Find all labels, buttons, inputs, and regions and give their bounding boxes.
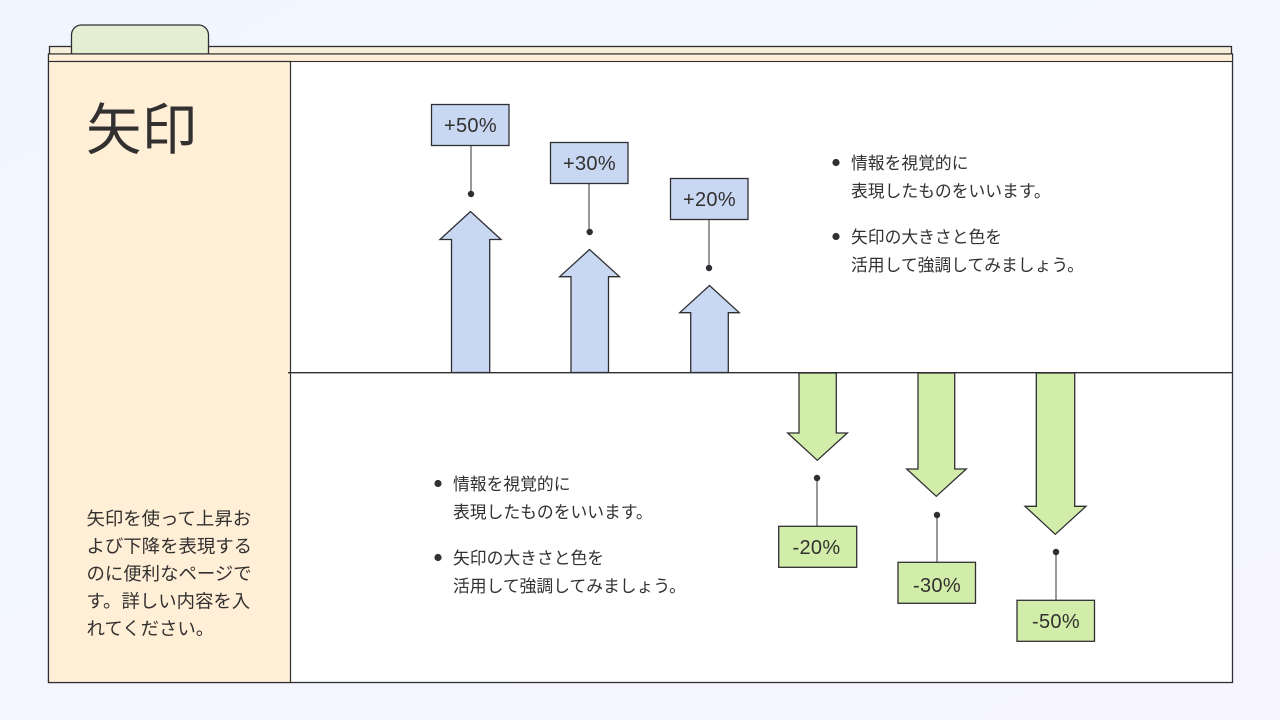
down arrow -20%: -20% bbox=[793, 537, 840, 559]
header band bbox=[48, 54, 1232, 62]
folder tab bbox=[72, 25, 208, 54]
upper bullet text: 矢印の大きさと色を bbox=[851, 228, 1002, 247]
sidebar panel bbox=[48, 62, 290, 682]
up arrow +30%: +30% bbox=[563, 153, 616, 175]
lower bullet text: 矢印の大きさと色を bbox=[453, 549, 604, 568]
sidebar description: す。詳しい内容を入 bbox=[86, 590, 250, 612]
upper bullet text: 活用して強調してみましょう。 bbox=[851, 256, 1084, 275]
folder back strip bbox=[50, 46, 1232, 54]
up arrow +50%: +50% bbox=[444, 115, 497, 137]
down arrow -20% bbox=[779, 373, 857, 567]
up arrow +30% bbox=[550, 142, 628, 372]
lower bullet text bbox=[434, 475, 686, 596]
down arrow -50% bbox=[1017, 373, 1094, 641]
down arrows group bbox=[779, 373, 1094, 641]
title: 矢印 bbox=[86, 100, 197, 162]
down arrow -30%: -30% bbox=[913, 575, 961, 597]
sidebar description bbox=[86, 508, 252, 639]
up arrow +50% bbox=[432, 104, 509, 372]
sidebar description: よび下降を表現する bbox=[86, 536, 252, 556]
up arrow +20% bbox=[670, 178, 748, 372]
down arrow -30% bbox=[898, 373, 976, 603]
up arrows group bbox=[432, 104, 748, 372]
sidebar description: れてください。 bbox=[86, 618, 214, 639]
sidebar description: 矢印を使って上昇お bbox=[86, 508, 251, 529]
baseline axis bbox=[288, 372, 1232, 374]
upper bullet text: 情報を視覚的に bbox=[851, 154, 968, 173]
down arrow -50%: -50% bbox=[1032, 611, 1080, 633]
lower bullet text: 活用して強調してみましょう。 bbox=[453, 577, 686, 596]
upper bullet text: 表現したものをいいます。 bbox=[851, 182, 1051, 201]
sidebar description: のに便利なページで bbox=[86, 563, 252, 584]
upper bullet text bbox=[832, 154, 1084, 275]
lower bullet text: 表現したものをいいます。 bbox=[453, 503, 653, 522]
up arrow +20%: +20% bbox=[683, 189, 736, 211]
lower bullet text: 情報を視覚的に bbox=[453, 475, 570, 494]
